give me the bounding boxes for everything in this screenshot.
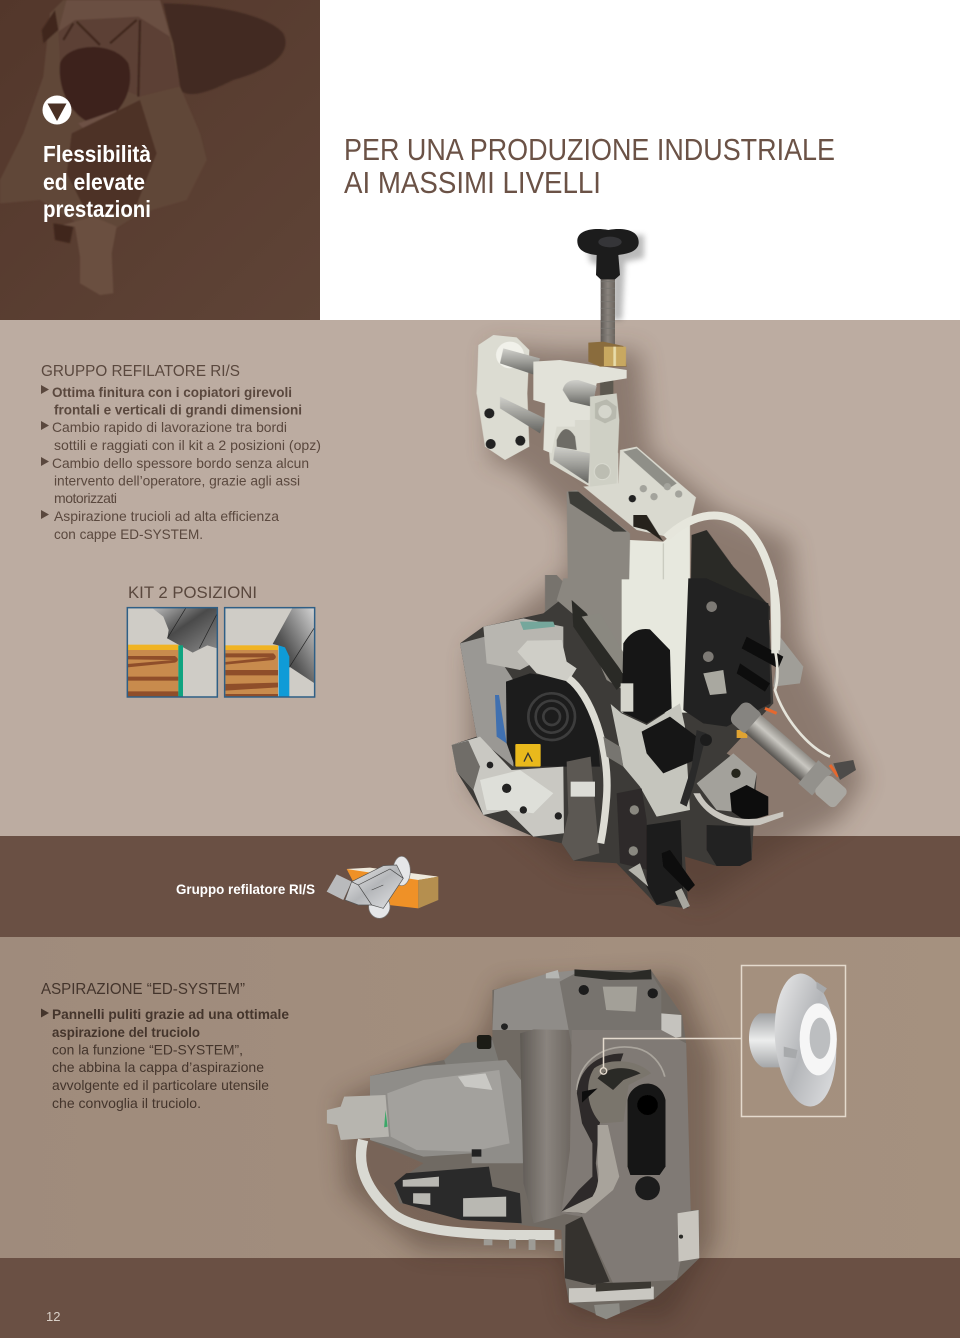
white column <box>628 520 690 620</box>
white column <box>622 579 688 713</box>
dark band with caption <box>0 836 960 937</box>
bullet text: aspirazione del truciolo <box>52 1024 200 1040</box>
photo: ED-SYSTEM aspiration unit <box>327 966 846 1320</box>
inner cavity <box>588 1061 651 1123</box>
upper machine: knob, rod, arm, column <box>477 229 770 623</box>
heading: Flessibilità: Flessibilità <box>43 141 151 167</box>
dark strap <box>562 757 599 861</box>
top head <box>560 973 661 1047</box>
white hose arc <box>666 515 777 650</box>
bullet list <box>52 384 321 542</box>
arm base fill <box>545 400 618 487</box>
top slide plate <box>583 447 696 537</box>
diagram: kit position 2 <box>225 608 315 697</box>
heading: Flessibilità: prestazioni <box>43 196 151 222</box>
main body <box>370 1060 523 1163</box>
yellow tab <box>737 730 747 738</box>
central grey block <box>611 703 690 817</box>
fan block <box>506 673 600 767</box>
bottom section <box>565 1217 610 1285</box>
subheading: aspirazione: ASPIRAZIONE “ED-SYSTEM” <box>41 981 245 998</box>
tan background band <box>0 320 960 836</box>
bullet text <box>52 1006 289 1111</box>
photo background <box>0 0 320 320</box>
hex screw <box>635 1176 660 1200</box>
bullet list: intervento dell’operatore, grazie agli assi <box>54 472 300 488</box>
bullet markers <box>41 385 49 519</box>
diagram: kit position 1 <box>127 608 217 697</box>
thin sensor cable <box>775 650 830 757</box>
bottom bar <box>569 1287 654 1303</box>
bullet list: Cambio dello spessore bordo senza alcun <box>52 455 309 471</box>
heading: Flessibilità <box>43 141 151 222</box>
bullet marker <box>41 1008 49 1018</box>
bullet text: Pannelli puliti grazie ad una ottimale <box>52 1006 289 1022</box>
curved opening rim <box>577 1047 665 1090</box>
connector box <box>483 618 563 670</box>
rear body <box>557 578 623 690</box>
orange clips and fitting <box>765 708 838 777</box>
callout box and leader <box>600 966 846 1116</box>
brass block <box>588 342 627 367</box>
vertical link plate <box>590 393 619 487</box>
blue strip <box>495 695 507 743</box>
motor knuckle <box>444 1040 499 1070</box>
bullet text: avvolgente ed il particolare utensile <box>52 1077 269 1093</box>
panel: yoga photo with heading <box>0 0 320 320</box>
lower rod <box>600 379 613 396</box>
left bracket <box>477 335 529 460</box>
caption: Gruppo refilatore RI/S: Gruppo refilatore RI/S <box>176 881 315 897</box>
right lower plate <box>697 753 757 813</box>
bolts under hose <box>484 1239 561 1251</box>
silhouette base <box>452 590 773 908</box>
clear tube <box>693 793 783 826</box>
bullet list: Ottima finitura con i copiatori girevoli <box>52 384 292 400</box>
right black assembly <box>683 578 771 727</box>
photo: woman stretching <box>0 0 286 295</box>
rod <box>601 278 615 345</box>
silhouette base <box>370 970 699 1319</box>
bullet list: Aspirazione trucioli ad alta efficienza <box>54 508 279 524</box>
text block: Gruppo refilatore <box>41 363 321 542</box>
page number: 12 <box>46 1309 60 1324</box>
rear box <box>492 970 577 1030</box>
black motor <box>622 629 672 723</box>
knob shadow <box>585 235 644 320</box>
bottom-left bracket <box>452 737 564 837</box>
bullet list: sottili e raggiati con il kit a 2 posizioni (opz) <box>54 437 321 453</box>
icon: downward triangle badge <box>42 96 72 124</box>
knob <box>577 229 639 279</box>
diagonal rods <box>572 600 627 690</box>
title: AI MASSIMI LIVELLI <box>344 165 601 200</box>
bullet text: che abbina la cappa d’aspirazione <box>52 1059 264 1075</box>
bullet text: che convoglia il truciolo. <box>52 1095 201 1111</box>
bullet text: con la funzione “ED-SYSTEM”, <box>52 1042 243 1058</box>
bullet list: frontali e verticali di grandi dimensioni <box>54 402 302 418</box>
title <box>344 132 835 200</box>
heading: Flessibilità: ed elevate <box>43 169 145 195</box>
right plate <box>561 1030 691 1283</box>
rear grey block <box>567 490 630 623</box>
bullet list: con cappe ED-SYSTEM. <box>54 526 203 542</box>
horizontal rods <box>500 348 540 375</box>
lower mechanics <box>394 1167 522 1223</box>
warning label <box>515 744 541 767</box>
drop shadow <box>340 975 715 1320</box>
sliding block <box>533 360 627 453</box>
lower black plates <box>617 788 648 870</box>
inset: aspiration hood part <box>749 971 842 1109</box>
U channel <box>561 1053 623 1213</box>
subheading: GRUPPO REFILATORE RI/S <box>41 363 240 380</box>
lower machine: motor, fan, cylinder, plates <box>452 578 856 909</box>
title: PER UNA PRODUZIONE INDUSTRIALE <box>344 132 835 167</box>
bottom footer band <box>0 1258 960 1338</box>
hose <box>361 1140 554 1235</box>
pneumatic cylinder <box>727 698 851 812</box>
white cable <box>568 678 607 843</box>
fan grille <box>528 693 575 740</box>
grey housing <box>460 637 513 767</box>
photo: edge trimming unit RI/S <box>452 229 865 909</box>
slot guide <box>561 1125 619 1213</box>
left clamp <box>327 1095 389 1140</box>
bullet list: Cambio rapido di lavorazione tra bordi <box>52 419 287 435</box>
lower taupe band <box>0 937 960 1258</box>
left plate <box>520 1029 573 1223</box>
black slot <box>628 1084 665 1175</box>
drop shadow <box>470 345 865 905</box>
dark assembly back <box>690 530 770 620</box>
black actuator <box>642 717 697 773</box>
bullet list: motorizzati <box>54 490 117 506</box>
text block: Pannelli puliti <box>41 1006 289 1111</box>
subheading: kit 2 posizioni: KIT 2 POSIZIONI <box>128 584 257 602</box>
icon: edge trimmer on workpiece <box>327 856 438 918</box>
